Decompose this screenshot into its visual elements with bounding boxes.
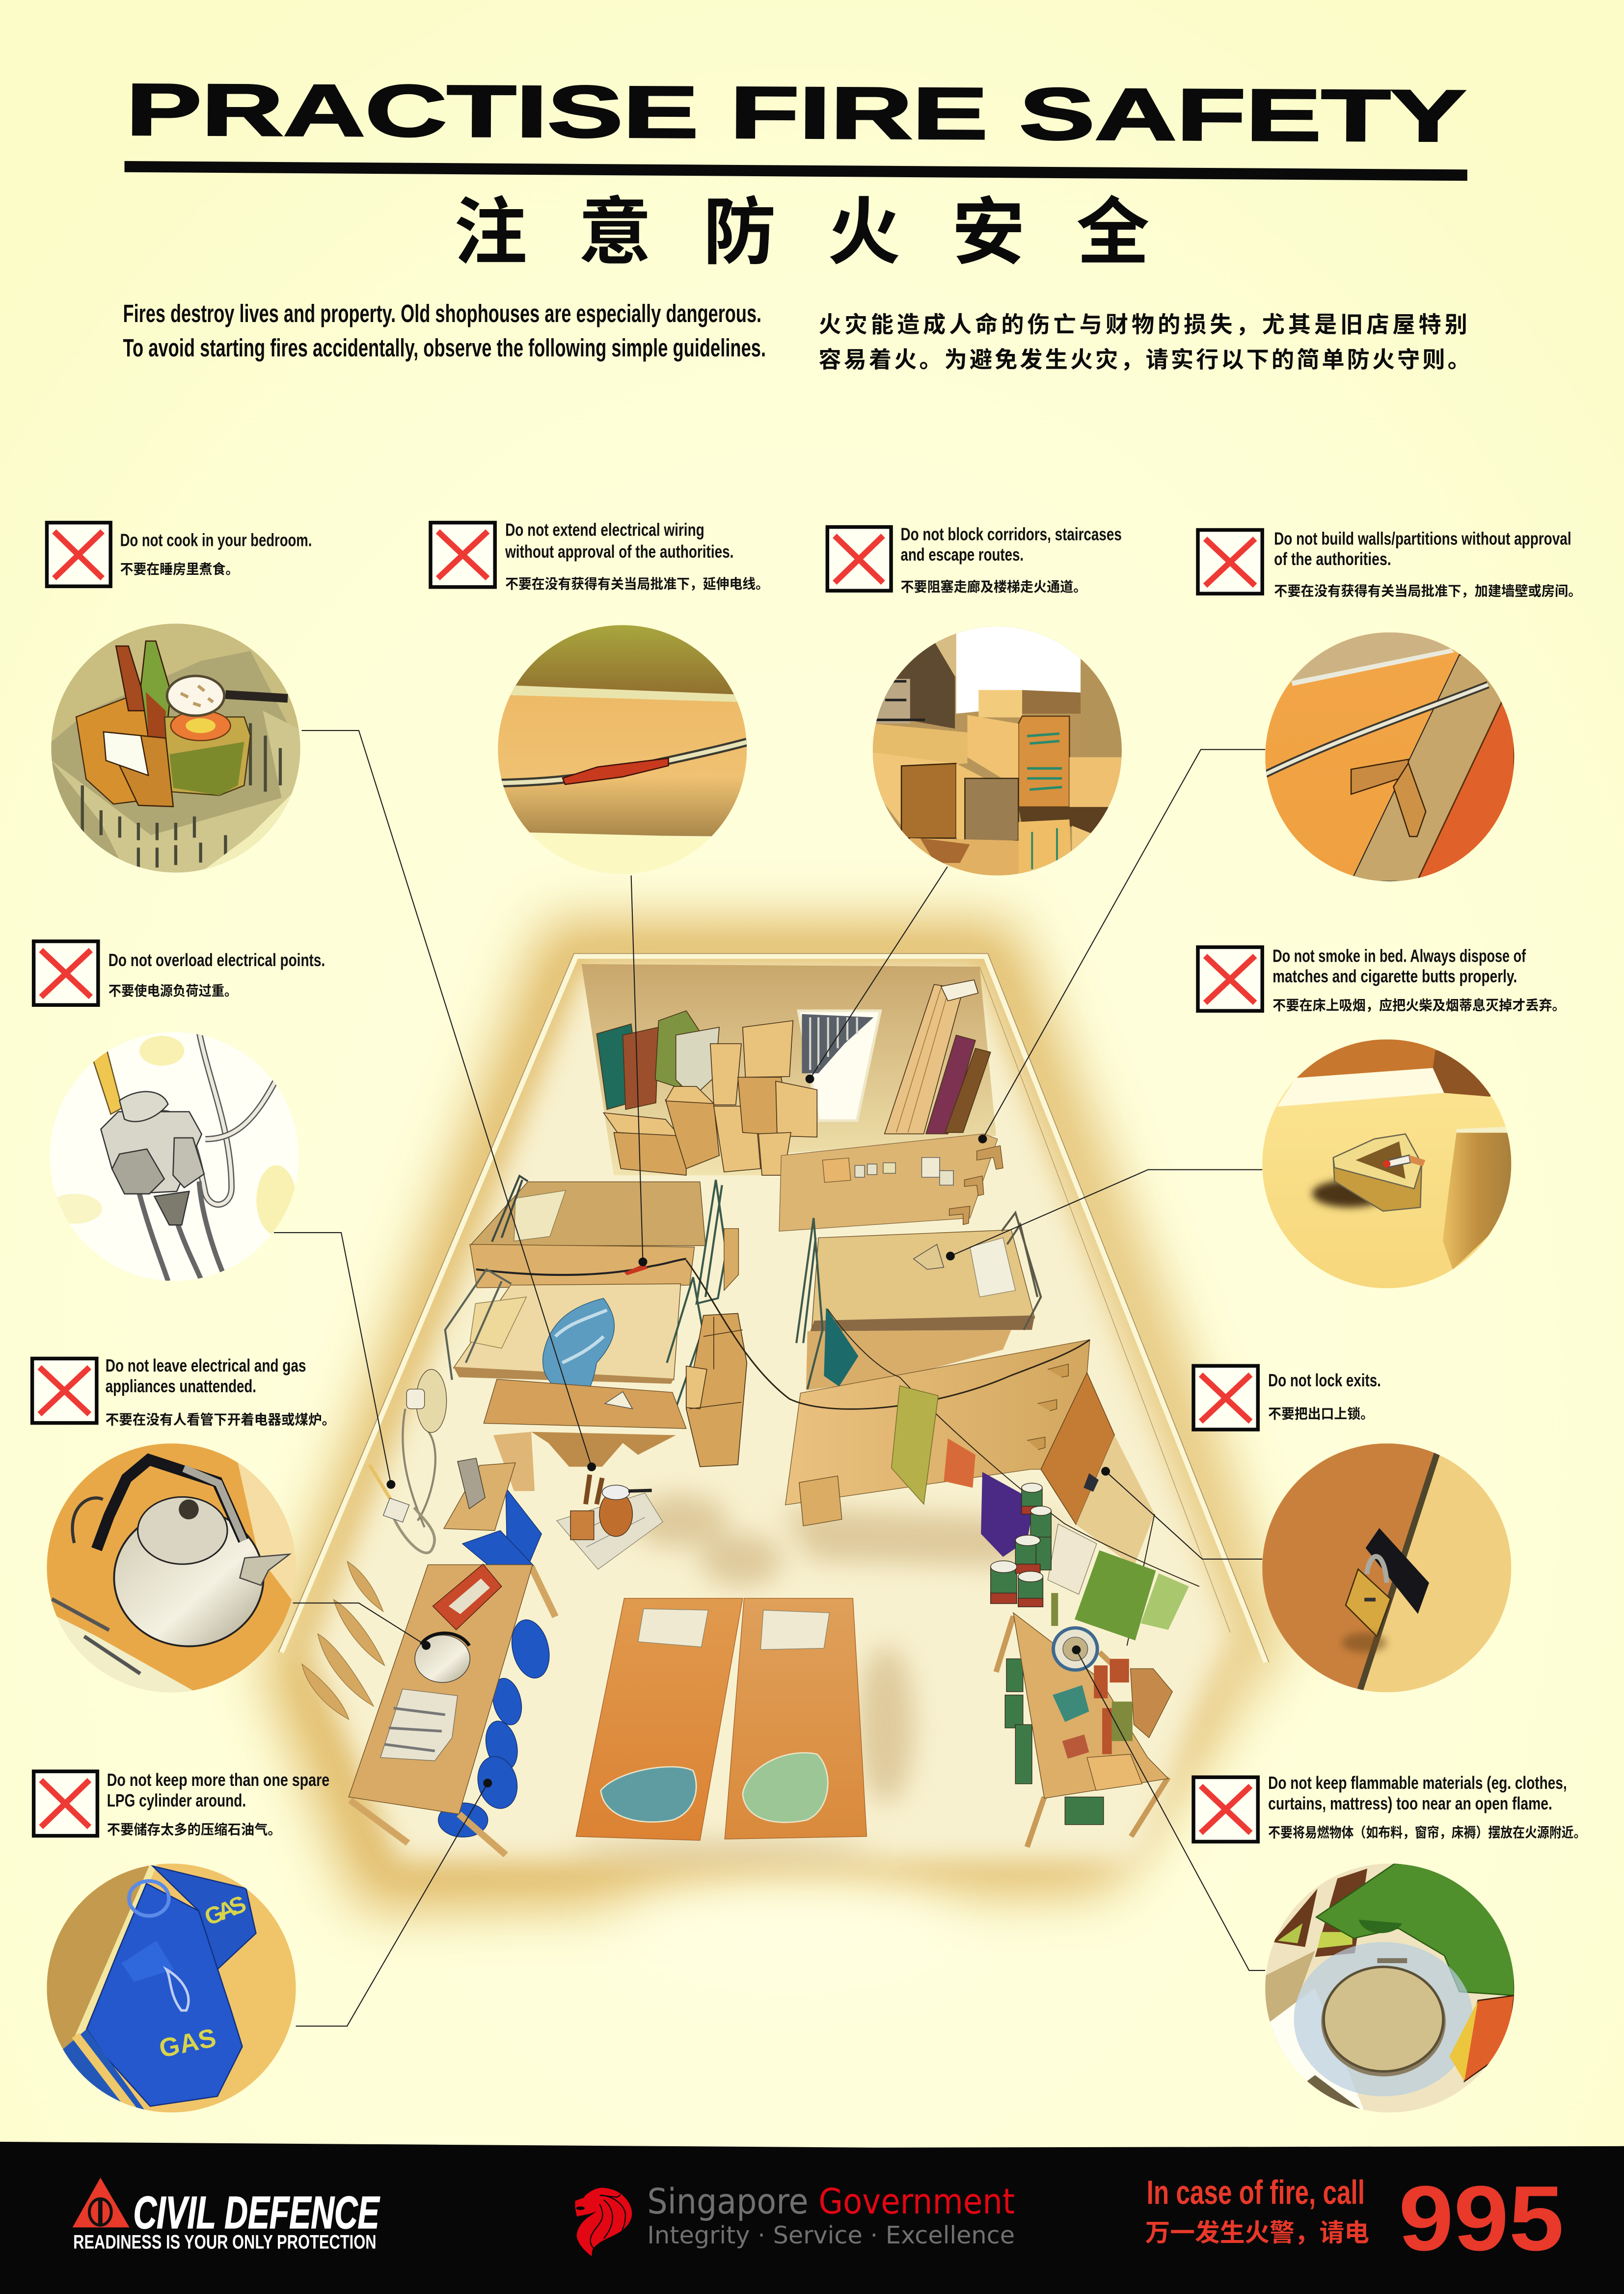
- warning text: 不要在没有获得有关当局批准下，加建墙壁或房间。: [1274, 583, 1581, 599]
- GAS label: GAS: [157, 2023, 218, 2063]
- callout: spare LPG cylinder: [34, 1770, 329, 1837]
- prohibition box: [34, 942, 98, 1005]
- warning text: [108, 950, 325, 999]
- warning text: Do not lock exits.: [1268, 1371, 1381, 1390]
- callout: extending wiring: [431, 520, 769, 592]
- values line: Integrity · Service · Excellence: [647, 2221, 1015, 2249]
- circle illustration: pot near cloth: [1265, 1863, 1514, 2112]
- faulty wire on bed frame: [476, 1259, 686, 1275]
- back wall: [582, 964, 996, 1175]
- prohibition box: [431, 523, 495, 587]
- warning text: 不要在睡房里煮食。: [120, 562, 239, 577]
- warning text: Do not leave electrical and gas: [106, 1356, 306, 1376]
- prohibition box: [827, 527, 891, 591]
- left table with heater and kettle: [349, 1564, 555, 1855]
- warning text: Do not smoke in bed. Always dispose of: [1272, 946, 1526, 966]
- front partition with door: [785, 1340, 1155, 1566]
- warning text: of the authorities.: [1274, 549, 1391, 569]
- intro text Chinese: 火灾能造成人命的伤亡与财物的损失，尤其是旧店屋特别: [818, 312, 1467, 337]
- Chinese title: 注意防火安全: [454, 191, 1150, 273]
- organisation name: CIVIL DEFENCE: [133, 2187, 380, 2238]
- slogan: READINESS IS YOUR ONLY PROTECTION: [73, 2231, 377, 2253]
- rear partition wall: [779, 1134, 1003, 1231]
- circle illustration: damaged wire on wall: [498, 625, 747, 874]
- intro text English: To avoid starting fires accidentally, observe the following simple guidelines.: [123, 334, 766, 362]
- leader: locked exit: [1101, 1467, 1262, 1559]
- planks and rolls: [885, 980, 991, 1134]
- Chinese call text: 万一发生火警，请电: [1145, 2219, 1369, 2247]
- stool with appliance: [444, 1458, 515, 1531]
- leader: wiring: [631, 875, 647, 1267]
- wordmark: Singapore: [647, 2181, 809, 2222]
- prohibition box: [47, 523, 110, 586]
- gas cylinders beneath stool: [438, 1488, 555, 1837]
- warning text: and escape routes.: [900, 545, 1024, 565]
- warning text: Do not keep more than one spare: [107, 1770, 329, 1790]
- callout: flammable materials: [1193, 1773, 1586, 1842]
- intro text Chinese: [818, 312, 1470, 373]
- floor: [307, 965, 1230, 1863]
- wordmark red: Government: [818, 2181, 1015, 2222]
- warning text: appliances unattended.: [106, 1376, 256, 1396]
- warning text: Do not overload electrical points.: [108, 950, 325, 970]
- leader: overloaded plug: [274, 1233, 395, 1489]
- ashtray on shelf: [605, 1392, 632, 1409]
- callout: cooking in bedroom: [47, 523, 312, 586]
- Singapore Government logo: [575, 2181, 1015, 2256]
- intro text Chinese: 容易着火。为避免发生火灾，请实行以下的简单防火守则。: [818, 347, 1470, 373]
- right table with kerosene stove and groceries: [996, 1593, 1172, 1847]
- dried leaves on floor: [302, 1562, 384, 1719]
- warning text: [1272, 946, 1566, 1013]
- washing line and clothes: [824, 1307, 1199, 1646]
- leader: partitions: [978, 750, 1265, 1143]
- prohibition box: [1198, 530, 1262, 594]
- suitcases and bags: [596, 1011, 719, 1109]
- lower left bunk bed: [445, 1269, 703, 1491]
- room outline: [278, 953, 1269, 1662]
- warning text: [1268, 1773, 1586, 1840]
- Civil Defence logo: [73, 2178, 380, 2253]
- prohibition box: [1193, 1777, 1258, 1842]
- circle illustration: ashtray on bed: [1262, 1039, 1511, 1288]
- callout: smoking in bed: [1198, 946, 1566, 1013]
- GAS label second cylinder: GAS: [201, 1890, 250, 1931]
- warning text: Do not block corridors, staircases: [900, 524, 1122, 544]
- title rule: [125, 161, 1467, 181]
- prohibition box: [34, 1771, 97, 1836]
- warning text: LPG cylinder around.: [107, 1791, 246, 1810]
- circle illustration: overloaded plug adaptor: [47, 1032, 299, 1281]
- emergency number: 995: [1399, 2167, 1564, 2270]
- warning text: 不要在没有获得有关当局批准下，延伸电线。: [505, 576, 769, 592]
- callout: locking exits: [1193, 1366, 1381, 1430]
- circle illustration: stove with bottles on newspaper: [51, 623, 300, 872]
- leader: smoking: [946, 1170, 1262, 1261]
- warning text: matches and cigarette butts properly.: [1272, 967, 1517, 986]
- upper left bunk bed: [470, 1176, 738, 1303]
- fan on wall: [403, 1369, 447, 1527]
- leader: flammable materials: [1072, 1646, 1265, 1970]
- golden halo around room: [266, 922, 1278, 1995]
- callout: blocking corridors: [827, 524, 1122, 594]
- warning text: 不要阻塞走廊及楼梯走火通道。: [900, 579, 1086, 594]
- warning text: Do not extend electrical wiring: [505, 520, 704, 540]
- overloaded plug and cables: [369, 1465, 434, 1553]
- circle illustration: kettle on table: [47, 1443, 296, 1692]
- warning text: [120, 530, 312, 577]
- warning text: 不要在床上吸烟，应把火柴及烟蒂息灭掉才丢弃。: [1272, 998, 1566, 1013]
- leader: blocked corridors: [806, 866, 947, 1083]
- warning text: 不要储存太多的压缩石油气。: [107, 1822, 281, 1837]
- circle illustration: gas cylinders: [47, 1863, 296, 2112]
- leader: kettle: [293, 1603, 431, 1650]
- warning text: [1274, 529, 1581, 599]
- callout: appliances unattended: [32, 1356, 335, 1428]
- doorway: [798, 1011, 880, 1121]
- circle illustration: boxes blocking corridor: [873, 626, 1122, 875]
- boxes by left bunk: [686, 1314, 747, 1467]
- sleeping mats: [576, 1598, 866, 1840]
- circle illustration: illegal partition wall: [1265, 620, 1514, 881]
- title: Practise Fire Safety: PRACTISE FIRE SAFETY: [126, 68, 1466, 157]
- electrical wire across room: [686, 1260, 1090, 1409]
- blue blanket: [543, 1298, 614, 1406]
- prohibition box: [32, 1358, 97, 1423]
- red triangle emblem: [73, 2178, 130, 2227]
- footer band: [0, 2142, 1624, 2294]
- prohibition box: [1198, 947, 1262, 1011]
- charcoal stove on newspaper: [557, 1475, 663, 1569]
- warning text: [1268, 1371, 1381, 1422]
- callout: overloading points: [34, 942, 325, 1005]
- warning text: [106, 1356, 335, 1428]
- lower shelf: [484, 1379, 686, 1429]
- room illustration: [266, 922, 1278, 1995]
- warning text: [900, 524, 1122, 594]
- leader: cooking: [301, 730, 596, 1471]
- leader lines with dots: [274, 730, 1265, 2026]
- warning text: 不要将易燃物体（如布料，窗帘，床褥）摆放在火源附近。: [1268, 1825, 1586, 1840]
- warning text: [505, 520, 769, 592]
- warning text: 不要把出口上锁。: [1268, 1406, 1374, 1422]
- warning text: Do not cook in your bedroom.: [120, 530, 312, 550]
- prohibition box: [1193, 1366, 1258, 1430]
- warning text: 不要在没有人看管下开着电器或煤炉。: [106, 1412, 335, 1428]
- lion head symbol: [575, 2188, 632, 2256]
- emergency call text: In case of fire, call: [1147, 2174, 1365, 2212]
- right bunk bed: [796, 1213, 1041, 1390]
- circle illustration: padlock on door: [1262, 1443, 1511, 1692]
- emergency call text: [1145, 2174, 1369, 2247]
- ashtray on bed: [914, 1244, 944, 1269]
- warning text: without approval of the authorities.: [505, 542, 733, 562]
- warning text: [107, 1770, 329, 1837]
- warning text: 不要使电源负荷过重。: [108, 983, 237, 999]
- callout: building partitions: [1198, 529, 1581, 599]
- intro text English: Fires destroy lives and property. Old shophouses are especially dangerous.: [123, 299, 761, 327]
- floor shadows: [569, 1376, 1072, 1859]
- stacked cardboard boxes: [603, 1021, 817, 1175]
- intro text English: [123, 299, 766, 362]
- leader: gas cylinder: [296, 1779, 492, 2026]
- warning text: curtains, mattress) too near an open flame.: [1268, 1794, 1552, 1813]
- stacked tin cans: [991, 1483, 1051, 1607]
